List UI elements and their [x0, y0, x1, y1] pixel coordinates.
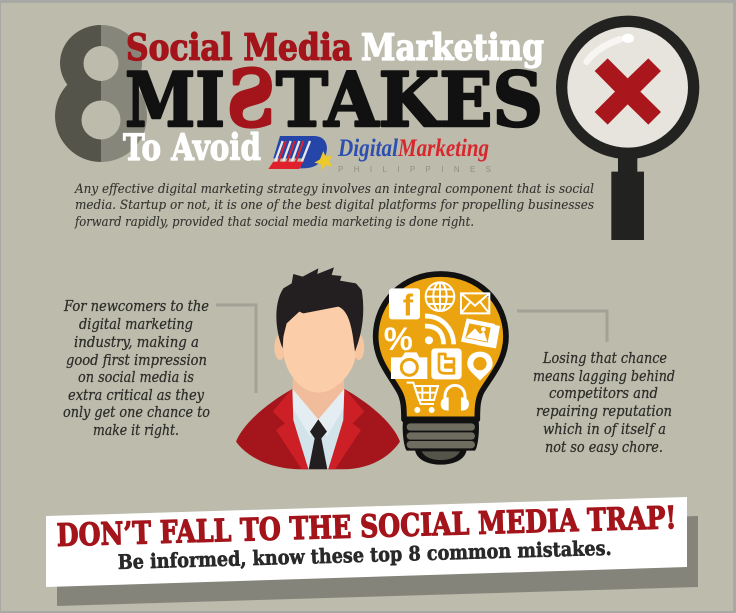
icon: location pin	[467, 352, 493, 381]
left text block: make it right.	[93, 423, 179, 439]
connector right	[517, 311, 607, 342]
banner shadow	[57, 516, 698, 606]
title	[123, 27, 544, 169]
right text block: repairing reputation	[536, 404, 672, 420]
icon: magnifying glass with red X	[562, 21, 694, 240]
icon: envelope	[461, 293, 489, 313]
logo wordmark: Digital: Digital	[337, 135, 398, 162]
title line: Marketing: Marketing	[361, 27, 544, 69]
shirt	[292, 388, 345, 469]
left text block: good first impression	[66, 353, 207, 369]
red X	[595, 58, 661, 125]
lens ring	[562, 21, 694, 153]
intro paragraph: Any effective digital marketing strategy involves an integral component that is social	[74, 182, 594, 197]
banner panel	[46, 497, 687, 587]
logo wordmark: Marketing: Marketing	[397, 135, 489, 162]
right text block: means lagging behind	[533, 369, 675, 385]
right text block: Losing that chance	[542, 351, 667, 367]
bulb glass	[376, 274, 506, 419]
connector left	[216, 305, 256, 393]
left text block: extra critical as they	[68, 388, 205, 404]
hair	[276, 267, 363, 352]
right text block: competitors and	[549, 386, 658, 402]
icon: headphones	[441, 385, 469, 411]
icon: twitter	[431, 348, 462, 379]
left text block: on social media is	[78, 370, 194, 386]
icon: facebook	[389, 288, 420, 322]
lens highlight	[587, 39, 620, 62]
logo wordmark: Philippines: PHILIPPINES	[338, 165, 491, 174]
left text block: For newcomers to the	[63, 299, 209, 315]
left text block	[63, 299, 210, 439]
illustration: light bulb with social icons	[376, 274, 506, 465]
right text block: which in of itself a	[543, 422, 666, 438]
ears	[274, 335, 286, 360]
banner subheading: Be informed, know these top 8 common mistakes.	[117, 536, 612, 574]
illustration: businessman	[236, 267, 400, 469]
left text block: only get one chance to	[63, 405, 210, 421]
handle	[611, 153, 644, 240]
icon: percent: %	[384, 320, 413, 357]
icon: camera	[391, 352, 427, 379]
intro paragraph: media. Startup or not, it is one of the best digital platforms for propelling businesses	[75, 198, 594, 213]
title line: Social Media: Social Media	[126, 27, 352, 69]
tie	[309, 419, 327, 469]
intro paragraph	[74, 182, 594, 230]
right text block: not so easy chore.	[545, 440, 663, 456]
collars	[292, 388, 345, 437]
logo: Digital Marketing Philippines	[268, 135, 491, 174]
icon: facebook: f	[403, 288, 414, 322]
banner	[46, 497, 687, 587]
jacket	[236, 388, 400, 469]
right lapel	[328, 388, 364, 469]
neck	[293, 373, 344, 419]
title letter: flipped red S: S	[227, 54, 275, 145]
title word: TAKES: TAKES	[276, 56, 543, 144]
right text block	[533, 351, 675, 456]
left text block: digital marketing	[79, 317, 193, 333]
title line: To Avoid: To Avoid	[123, 127, 261, 169]
icon: globe	[426, 282, 454, 311]
intro paragraph: forward rapidly, provided that social media marketing is done right.	[74, 215, 474, 230]
icon: rss	[425, 316, 454, 344]
icon: shopping cart	[407, 383, 438, 412]
bulb base	[403, 419, 479, 451]
left text block: industry, making a	[74, 335, 199, 351]
logo mark	[268, 136, 333, 170]
face	[284, 303, 355, 393]
title word: MI: MI	[125, 56, 225, 144]
big numeral 8: 8	[62, 4, 140, 188]
icon: photos	[461, 318, 500, 348]
left lapel	[273, 388, 308, 469]
